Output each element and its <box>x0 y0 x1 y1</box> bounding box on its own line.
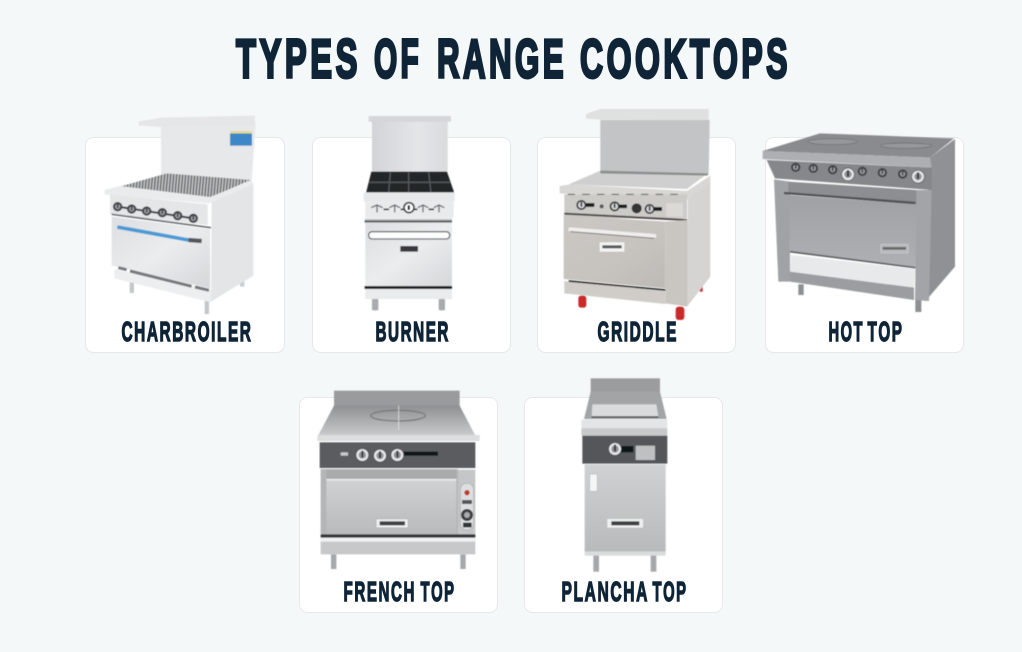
illustration: hot top range <box>763 133 955 312</box>
title: TYPES <box>236 28 361 90</box>
label: GRIDDLE <box>598 316 678 347</box>
illustration: burner range <box>364 116 455 310</box>
panel: charbroiler <box>86 116 284 352</box>
panel: burner <box>312 116 510 352</box>
label: TOP <box>868 316 904 347</box>
title: RANGE <box>437 28 567 90</box>
card background <box>300 398 498 612</box>
illustration: french top range <box>317 391 480 569</box>
label: BURNER <box>376 316 450 347</box>
label: PLANCHA <box>562 576 649 607</box>
panel: griddle <box>538 109 736 352</box>
card background <box>86 138 284 352</box>
panel: hot top <box>763 133 964 352</box>
card background <box>538 138 736 352</box>
label: TOP <box>652 576 688 607</box>
label: CHARBROILER <box>122 316 252 347</box>
label: HOT <box>828 316 864 347</box>
card background <box>524 398 722 612</box>
panel: french top <box>300 391 498 612</box>
title: COOKTOPS <box>580 28 791 90</box>
label: FRENCH <box>344 576 416 607</box>
illustration: charbroiler range <box>104 116 256 314</box>
label: TOP <box>420 576 456 607</box>
illustration: plancha top range <box>581 378 667 572</box>
card background <box>312 138 510 352</box>
card background <box>766 138 964 352</box>
illustration: griddle range <box>560 109 710 320</box>
title: OF <box>374 28 422 90</box>
title <box>236 28 791 90</box>
panel: plancha top <box>524 378 722 612</box>
